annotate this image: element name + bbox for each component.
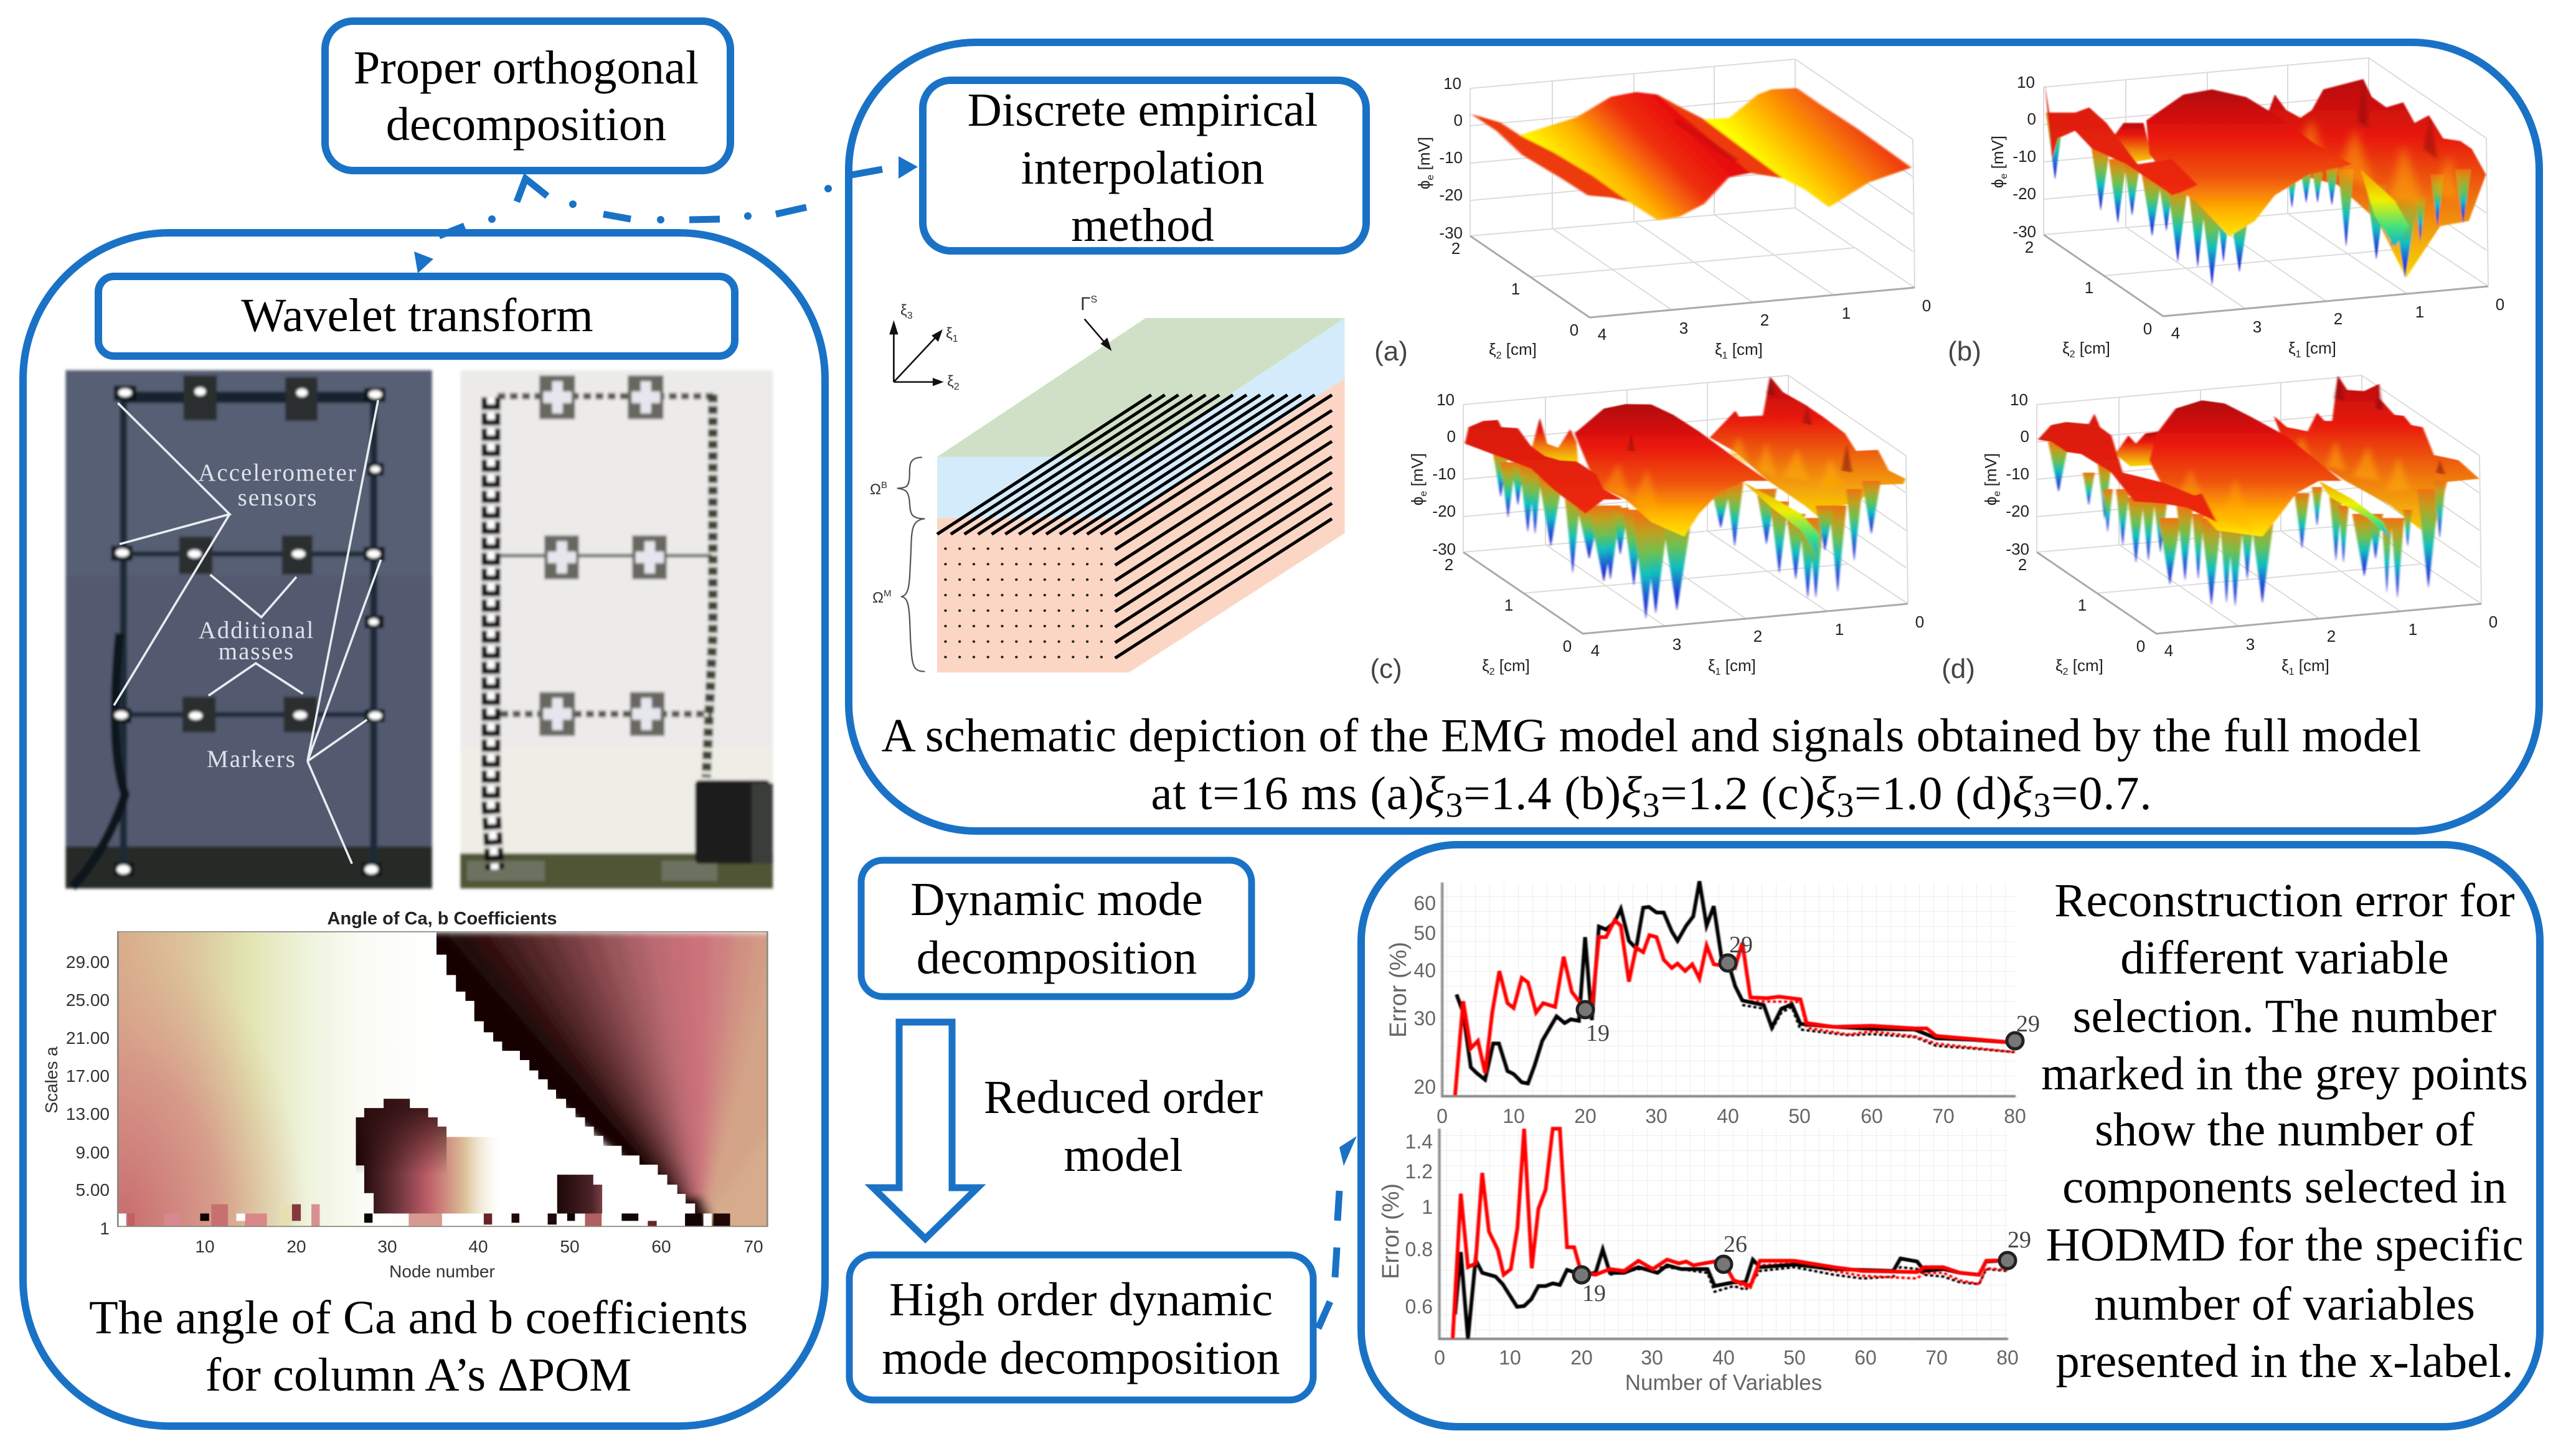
chart: surface plot (d): 1 — [2289, 667, 2295, 677]
chart: reconstruction error lower: 1.4 — [1405, 1130, 1433, 1153]
diagram: EMG muscle model block: ξ — [947, 373, 954, 390]
caption: EMG model and signals: =1.0 (d) — [1854, 767, 2012, 820]
chart: angle of Ca, b coefficients heat map: 30 — [377, 1237, 397, 1256]
chart: surface plot (b): 2 — [2070, 349, 2075, 360]
chart: surface plot (b): 4 — [2171, 324, 2180, 342]
caption: EMG model and signals: =0.7. — [2051, 767, 2152, 820]
chart: surface plot (a): -30 — [1439, 223, 1463, 242]
box: proper orthogonal decomposition: Proper orthogonal — [354, 41, 699, 94]
chart: surface plot (d) — [1941, 375, 2498, 684]
chart: angle of Ca, b coefficients heat map: Node number — [389, 1262, 495, 1281]
label: reduced order model — [984, 1071, 1263, 1181]
chart: reconstruction error upper: 30 — [1645, 1105, 1668, 1127]
chart: surface plot (c): -30 — [1432, 540, 1456, 558]
caption: reconstruction error description: HODMD for the specific — [2046, 1218, 2523, 1271]
chart: surface plot (b): [cm] — [2075, 339, 2110, 357]
box: dynamic mode decomposition: decomposition — [917, 931, 1197, 984]
chart: surface plot (b): 0 — [2143, 319, 2152, 338]
box: discrete empirical interpolation method: interpolation — [1021, 141, 1264, 194]
panel: discrete empirical interpolation method — [849, 42, 2539, 831]
box: wavelet transform — [98, 276, 735, 356]
chart: reconstruction error upper: 40 — [1413, 959, 1436, 982]
caption: EMG model and signals: 3 — [2033, 786, 2050, 825]
chart: surface plot (c): 2 — [1445, 555, 1453, 574]
chart: reconstruction error lower: 80 — [1996, 1346, 2019, 1369]
chart: surface plot (c): [cm] — [1721, 656, 1756, 675]
chart: surface plot (a): 2 — [1496, 350, 1502, 361]
caption: angle of coefficients: The angle of Ca and b coefficients — [89, 1291, 748, 1344]
chart: surface plot (d): ϕ — [1981, 497, 2000, 505]
box: discrete empirical interpolation method — [923, 80, 1366, 251]
chart: surface plot (c): [mV] — [1408, 453, 1427, 491]
chart: surface plot (c): 0 — [1563, 637, 1572, 655]
chart: reconstruction error lower: 1.2 — [1405, 1160, 1433, 1183]
chart: surface plot (c): 1 — [1715, 667, 1721, 677]
chart: surface plot (b): 0 — [2027, 110, 2036, 128]
chart: reconstruction error upper: 20 — [1413, 1076, 1436, 1098]
caption: reconstruction error description: presented in the x-label. — [2056, 1335, 2513, 1388]
chart: reconstruction error upper: 29 — [2016, 1011, 2040, 1037]
chart: angle of Ca, b coefficients heat map: 70 — [743, 1237, 763, 1256]
chart: surface plot (a): ξ — [1489, 340, 1496, 359]
chart: surface plot (c): 2 — [1489, 667, 1495, 677]
chart: reconstruction error lower: 0.8 — [1405, 1238, 1433, 1261]
chart: angle of Ca, b coefficients heat map — [42, 909, 823, 1281]
chart: surface plot (b): ξ — [2062, 339, 2070, 357]
chart: surface plot (d): -10 — [2006, 464, 2029, 483]
diagram: EMG muscle model block: 2 — [954, 382, 960, 392]
chart: surface plot (c): e — [1418, 491, 1429, 497]
chart: angle of Ca, b coefficients heat map: 17.00 — [66, 1066, 110, 1086]
chart: surface plot (d): 3 — [2246, 635, 2255, 654]
chart: surface plot (a): 0 — [1570, 321, 1578, 339]
diagram: EMG muscle model block: Γ — [1080, 294, 1091, 314]
diagram: EMG muscle model block: Ω — [870, 481, 881, 498]
chart: surface plot (b): -10 — [2012, 147, 2036, 166]
chart: reconstruction error lower: 26 — [1724, 1231, 1747, 1257]
chart: reconstruction error lower: Number of Variables — [1625, 1371, 1822, 1395]
chart: surface plot (a): [cm] — [1728, 340, 1763, 359]
chart: surface plot (b): e — [1999, 174, 2009, 179]
chart: surface plot (c): 0 — [1447, 427, 1456, 446]
caption: EMG model and signals: ξ — [2012, 767, 2033, 820]
chart: angle of Ca, b coefficients heat map: 20 — [286, 1237, 306, 1256]
chart: surface plot (b): [mV] — [1988, 136, 2007, 174]
chart: surface plot (a): [mV] — [1415, 137, 1433, 175]
chart: surface plot (b) — [1948, 58, 2504, 367]
chart: surface plot (a): 0 — [1922, 296, 1931, 315]
chart: reconstruction error upper: 60 — [1861, 1105, 1883, 1127]
chart: surface plot (d): 4 — [2164, 641, 2173, 660]
chart: reconstruction error lower: 10 — [1499, 1346, 1521, 1369]
chart: reconstruction error lower: 60 — [1854, 1346, 1877, 1369]
chart: surface plot (b): 1 — [2296, 349, 2301, 360]
chart: reconstruction error upper: Error (%) — [1385, 942, 1412, 1038]
caption: EMG model and signals — [882, 709, 2421, 825]
chart: surface plot (d): 0 — [2021, 427, 2029, 446]
caption: reconstruction error description: number of variables — [2094, 1277, 2475, 1330]
box: dynamic mode decomposition — [861, 860, 1252, 997]
chart: surface plot (d): 2 — [2327, 627, 2336, 646]
chart: surface plot (b): 2 — [2025, 238, 2034, 256]
chart: surface plot (a): e — [1425, 175, 1436, 181]
diagram: EMG muscle model block: B — [881, 480, 887, 491]
photo: instrumented frame with markers: sensors — [238, 484, 318, 511]
chart: surface plot (a): 4 — [1598, 325, 1606, 344]
chart: surface plot (c): [cm] — [1495, 656, 1530, 675]
chart: surface plot (d): (d) — [1941, 654, 1975, 684]
chart: surface plot (a): [cm] — [1502, 340, 1537, 359]
chart: surface plot (c): 1 — [1504, 596, 1513, 614]
caption: reconstruction error description: selection. The number — [2073, 990, 2496, 1043]
chart: surface plot (d): 0 — [2489, 613, 2498, 631]
diagram: EMG muscle model block: Ω — [872, 589, 884, 606]
chart: surface plot (b): 3 — [2253, 317, 2262, 336]
chart: angle of Ca, b coefficients heat map: 1 — [100, 1219, 110, 1238]
chart: surface plot (a): ξ — [1715, 340, 1722, 359]
caption: reconstruction error description: show the number of — [2095, 1103, 2475, 1156]
chart: angle of Ca, b coefficients heat map: 25.00 — [66, 990, 110, 1010]
chart: surface plot (d): [mV] — [1981, 453, 2000, 491]
chart: surface plot (d): 0 — [2136, 637, 2145, 655]
chart: reconstruction error upper: 20 — [1574, 1105, 1597, 1127]
photo: instrumented frame with markers: Additional — [199, 617, 314, 644]
chart: surface plot (d): e — [1992, 491, 2003, 497]
chart: angle of Ca, b coefficients heat map: 21.00 — [66, 1028, 110, 1048]
chart: angle of Ca, b coefficients heat map: 13.00 — [66, 1104, 110, 1124]
chart: surface plot (d): 2 — [2018, 555, 2027, 574]
chart: surface plot (d): [cm] — [2295, 656, 2329, 675]
box: proper orthogonal decomposition: decomposition — [386, 98, 666, 151]
chart: surface plot (c): ξ — [1482, 656, 1489, 675]
chart: reconstruction error lower: 40 — [1712, 1346, 1735, 1369]
label: reduced order model: model — [1064, 1129, 1183, 1181]
chart: angle of Ca, b coefficients heat map: Scales a — [42, 1046, 61, 1114]
box: discrete empirical interpolation method: Discrete empirical — [968, 83, 1318, 136]
chart: surface plot (c): 1 — [1835, 620, 1844, 639]
chart: angle of Ca, b coefficients heat map: 5.00 — [76, 1180, 110, 1200]
chart: surface plot (c): (c) — [1370, 654, 1402, 684]
chart: surface plot (a): 0 — [1454, 111, 1463, 129]
chart: reconstruction error upper: 80 — [2004, 1105, 2026, 1127]
chart: reconstruction error upper: 60 — [1413, 892, 1436, 914]
chart: reconstruction error upper: 10 — [1503, 1105, 1525, 1127]
chart: reconstruction error upper: 50 — [1788, 1105, 1811, 1127]
caption: EMG model and signals: 3 — [1643, 786, 1660, 825]
caption: EMG model and signals: =1.2 (c) — [1660, 767, 1815, 820]
chart: angle of Ca, b coefficients heat map: 29.00 — [66, 952, 110, 972]
chart: surface plot (b): 1 — [2085, 278, 2093, 297]
chart: surface plot (b): 2 — [2334, 309, 2342, 328]
chart: surface plot (a) — [1374, 59, 1931, 367]
chart: surface plot (a): -10 — [1439, 148, 1463, 167]
chart: reconstruction error upper: 0 — [1437, 1105, 1448, 1127]
chart: angle of Ca, b coefficients heat map: 10 — [195, 1237, 215, 1256]
chart: surface plot (d): 10 — [2010, 390, 2028, 409]
chart: surface plot (d): ξ — [2055, 656, 2063, 675]
caption: reconstruction error description: different variable — [2120, 931, 2449, 984]
chart: surface plot (c): ξ — [1708, 656, 1715, 675]
chart: reconstruction error lower: 20 — [1570, 1346, 1593, 1369]
caption: EMG model and signals: =1.4 (b) — [1463, 767, 1621, 820]
caption: EMG model and signals: ξ — [1621, 767, 1642, 820]
chart: surface plot (b): -30 — [2012, 222, 2036, 241]
box: discrete empirical interpolation method: method — [1071, 199, 1214, 251]
chart: surface plot (a): 3 — [1679, 319, 1688, 337]
chart: surface plot (c): 2 — [1753, 627, 1762, 646]
diagram: EMG muscle model block: S — [1091, 294, 1097, 305]
caption: EMG model and signals: 3 — [1836, 786, 1854, 825]
chart: reconstruction error upper: 40 — [1717, 1105, 1739, 1127]
caption: reconstruction error description: marked in the grey points — [2041, 1047, 2528, 1100]
chart: reconstruction error upper: 19 — [1586, 1020, 1610, 1046]
chart: reconstruction error lower: 70 — [1925, 1346, 1948, 1369]
chart: surface plot (c) — [1370, 375, 1924, 684]
chart: surface plot (a): 1 — [1511, 279, 1520, 298]
diagram: EMG muscle model block: ξ — [900, 302, 907, 319]
chart: reconstruction error upper: 30 — [1413, 1007, 1436, 1030]
box: dynamic mode decomposition: Dynamic mode — [910, 873, 1203, 926]
caption: angle of coefficients — [89, 1291, 748, 1401]
chart: reconstruction error lower: 1 — [1422, 1196, 1433, 1218]
box: high order dynamic mode decomposition: High order dynamic — [889, 1273, 1273, 1326]
chart: surface plot (d): 2 — [2063, 667, 2069, 677]
label: reduced order model: Reduced order — [984, 1071, 1263, 1124]
box: wavelet transform: Wavelet transform — [241, 289, 593, 342]
arrow: hollow block arrow down — [873, 1022, 978, 1239]
chart: surface plot (c): 4 — [1591, 641, 1600, 660]
diagram: EMG muscle model block: M — [884, 588, 891, 599]
diagram: EMG muscle model block: ξ — [946, 325, 953, 342]
chart: surface plot (a): 2 — [1451, 239, 1460, 258]
chart: reconstruction error lower: 0.6 — [1405, 1295, 1433, 1318]
panel: reconstruction error — [1361, 845, 2540, 1427]
chart: surface plot (c): -10 — [1432, 464, 1456, 483]
chart: surface plot (a): 10 — [1443, 74, 1461, 93]
chart: surface plot (a): 2 — [1760, 311, 1769, 329]
chart: angle of Ca, b coefficients heat map: 50 — [560, 1237, 580, 1256]
caption: angle of coefficients: for column A’s ΔPOM — [205, 1348, 631, 1401]
caption: EMG model and signals: ξ — [1816, 767, 1836, 820]
photo: instrumented frame with markers: Markers — [207, 746, 296, 772]
chart: surface plot (c): 0 — [1915, 613, 1924, 631]
chart: surface plot (a): 1 — [1842, 304, 1851, 322]
chart: reconstruction error lower: 0 — [1434, 1346, 1445, 1369]
arrow: dash-dot link from POD to wavelet transform and DEIM — [414, 156, 918, 273]
chart: angle of Ca, b coefficients heat map: 40 — [468, 1237, 488, 1256]
chart: surface plot (c): 3 — [1673, 635, 1681, 654]
chart: surface plot (b): 1 — [2415, 303, 2424, 321]
chart: surface plot (c): 10 — [1437, 390, 1455, 409]
box: high order dynamic mode decomposition — [849, 1255, 1313, 1400]
chart: surface plot (b): 0 — [2496, 295, 2504, 314]
box: proper orthogonal decomposition — [325, 21, 730, 171]
chart: surface plot (c): ϕ — [1408, 497, 1427, 505]
photo: instrumented frame with markers: masses — [219, 638, 295, 665]
photo: instrumented frame with markers — [65, 370, 432, 888]
chart: surface plot (a): ϕ — [1415, 181, 1433, 189]
chart: surface plot (d): ξ — [2281, 656, 2289, 675]
chart: surface plot (a): (a) — [1374, 336, 1408, 367]
chart: reconstruction error upper: 70 — [1932, 1105, 1955, 1127]
chart: surface plot (b): ϕ — [1988, 179, 2007, 188]
caption: EMG model and signals: 3 — [1445, 786, 1463, 825]
chart: reconstruction error lower — [1378, 1129, 2031, 1395]
chart: surface plot (d): -20 — [2006, 502, 2029, 520]
arrow: dashed link from HODMD to reconstruction error — [1318, 1136, 1357, 1328]
diagram: EMG muscle model block: 1 — [953, 334, 958, 344]
chart: surface plot (c): -20 — [1432, 502, 1456, 520]
chart: surface plot (b): ξ — [2288, 339, 2296, 357]
chart: reconstruction error lower: 19 — [1582, 1280, 1606, 1307]
chart: reconstruction error upper: 29 — [1729, 932, 1753, 958]
photo: bare test frame — [460, 370, 773, 888]
caption: reconstruction error description: Reconstruction error for — [2054, 874, 2515, 927]
chart: reconstruction error upper: 50 — [1413, 922, 1436, 944]
caption: EMG model and signals: at t=16 ms (a)ξ — [1151, 767, 1445, 820]
chart: angle of Ca, b coefficients heat map: 60 — [651, 1237, 671, 1256]
chart: surface plot (b): -20 — [2012, 184, 2036, 203]
caption: reconstruction error description — [2041, 874, 2528, 1388]
panel: wavelet transform — [23, 233, 825, 1426]
chart: angle of Ca, b coefficients heat map: 9.00 — [76, 1143, 110, 1162]
chart: surface plot (d): 1 — [2409, 620, 2417, 639]
caption: reconstruction error description: components selected in — [2062, 1160, 2507, 1213]
chart: surface plot (a): 1 — [1722, 350, 1728, 361]
chart: surface plot (d): [cm] — [2069, 656, 2103, 675]
chart: reconstruction error lower: 50 — [1783, 1346, 1806, 1369]
chart: angle of Ca, b coefficients heat map: Angle of Ca, b Coefficients — [328, 909, 557, 929]
chart: reconstruction error lower: Error (%) — [1378, 1183, 1404, 1279]
chart: reconstruction error upper — [1385, 881, 2040, 1127]
chart: surface plot (b): (b) — [1948, 336, 1981, 367]
arrows: annotation pointers — [114, 400, 381, 864]
chart: surface plot (d): 1 — [2078, 596, 2087, 614]
chart: surface plot (a): -20 — [1439, 185, 1463, 204]
chart: reconstruction error lower: 29 — [2007, 1227, 2031, 1253]
chart: surface plot (d): -30 — [2006, 540, 2029, 558]
photo: instrumented frame with markers: Accelerometer — [198, 459, 357, 486]
chart: surface plot (b): [cm] — [2301, 339, 2336, 357]
chart: surface plot (b): 10 — [2017, 73, 2035, 92]
chart: reconstruction error lower: 30 — [1641, 1346, 1663, 1369]
diagram: EMG muscle model block — [870, 294, 1345, 672]
box: high order dynamic mode decomposition: mode decomposition — [882, 1331, 1280, 1384]
diagram: EMG muscle model block: 3 — [907, 311, 913, 321]
caption: EMG model and signals: A schematic depiction of the EMG model and signals obtained by the full model — [882, 709, 2421, 762]
